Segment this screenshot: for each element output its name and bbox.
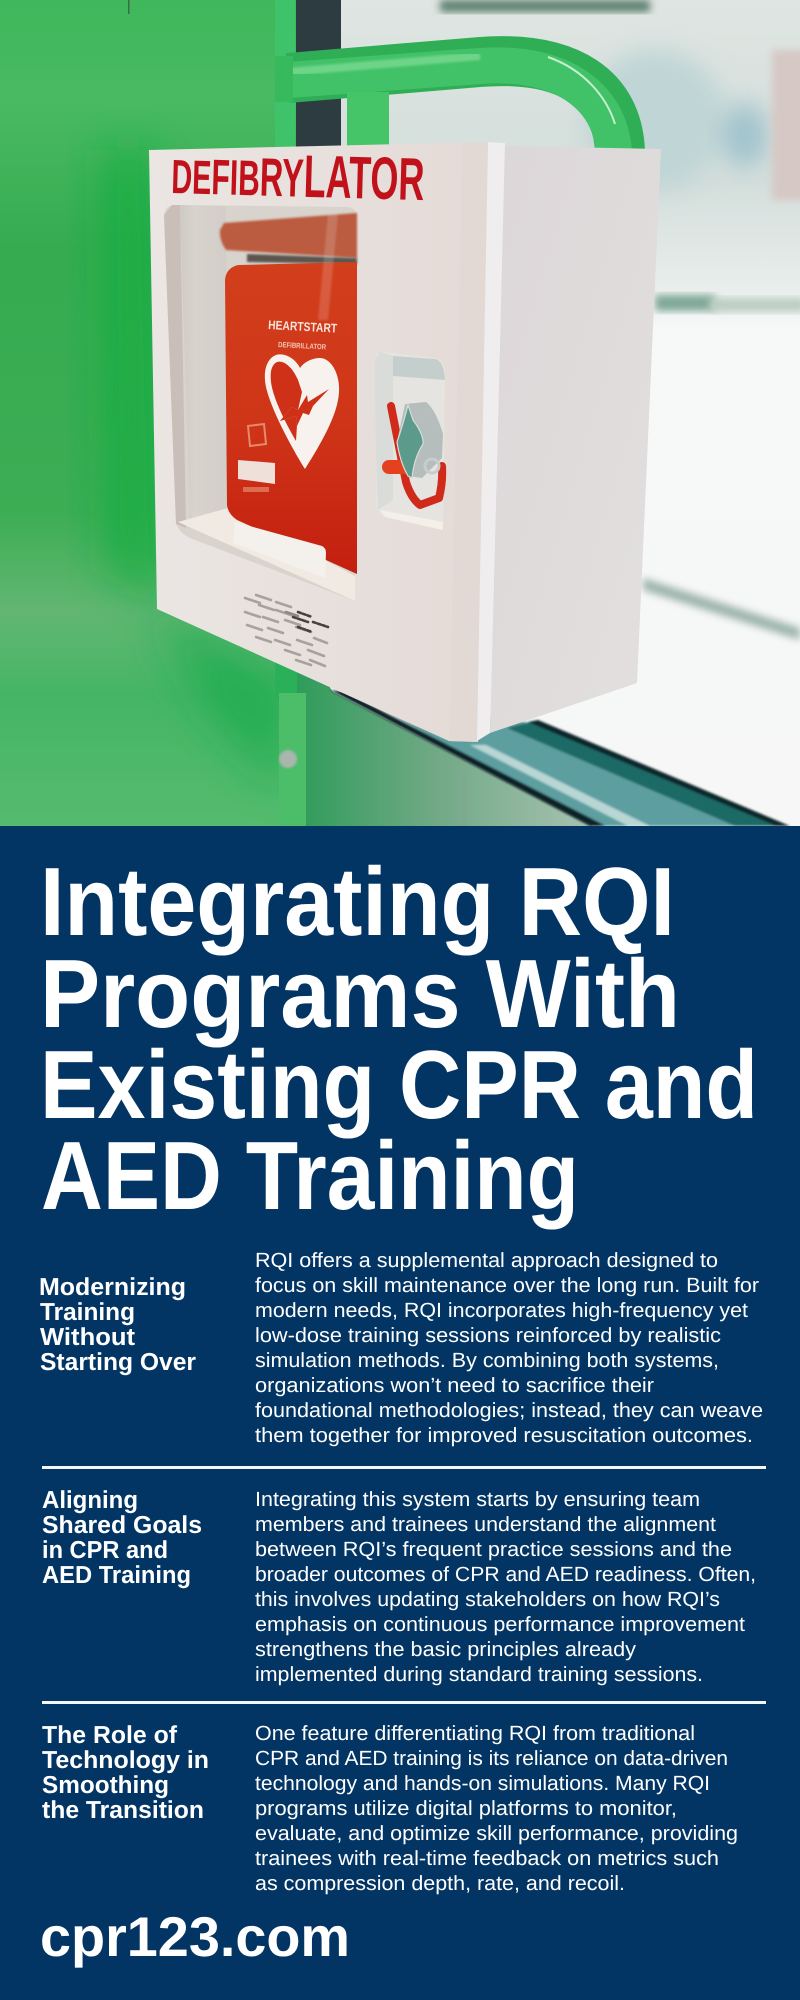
latch recess	[375, 352, 445, 530]
section 3 heading: Technology in	[42, 1747, 209, 1774]
section 1 body text: focus on skill maintenance over the long run. Built for	[255, 1274, 759, 1297]
section 2 heading: Aligning	[42, 1487, 138, 1514]
section 2 body text	[255, 1488, 756, 1686]
glass reflection	[318, 214, 338, 320]
section 1 body text: organizations won’t need to sacrifice their	[255, 1374, 654, 1397]
section 3 heading: the Transition	[42, 1797, 204, 1824]
navy content panel	[0, 826, 800, 2000]
photo background: window frame post	[295, 0, 341, 150]
section 1 heading: Modernizing	[39, 1274, 186, 1301]
icon: heart with lightning bolt	[265, 354, 339, 469]
title	[40, 847, 758, 1230]
section 3 body text: programs utilize digital platforms to monitor,	[255, 1797, 677, 1820]
viewing window	[164, 205, 357, 601]
red seal strap	[389, 406, 442, 505]
AED small sticker	[238, 424, 275, 492]
AED label: HEARTSTART: DEFIBRILLATOR	[278, 340, 327, 352]
AED device body	[225, 262, 357, 574]
AED cap	[220, 213, 357, 258]
section 3 heading	[42, 1722, 209, 1824]
section 2 body text: broader outcomes of CPR and AED readiness. Often,	[255, 1563, 756, 1586]
section 1: Modernizing Training	[39, 1249, 763, 1447]
section 1 body text: them together for improved resuscitation outcomes.	[255, 1424, 753, 1447]
title: Programs With	[40, 939, 680, 1048]
photo: wall-mounted defibrillator cabinet	[0, 0, 800, 826]
speaker vent slots	[245, 595, 328, 666]
section 1 heading: Starting Over	[40, 1349, 196, 1376]
section 3 heading: The Role of	[42, 1722, 178, 1749]
section 1 heading: Training	[40, 1299, 135, 1326]
section 3: The Role of Technology	[42, 1722, 738, 1895]
section 1 body text: low-dose training sessions reinforced by realistic	[255, 1324, 721, 1347]
title: AED Training	[41, 1121, 579, 1230]
cabinet front	[149, 139, 505, 742]
section 3 body text: trainees with real-time feedback on metrics such	[255, 1847, 719, 1870]
AED label: HEARTSTART	[268, 318, 338, 352]
hinge plate and screw	[279, 693, 306, 826]
section 3 body text	[255, 1722, 738, 1895]
section 2 heading: AED Training	[42, 1562, 191, 1589]
section 2 body text: this involves updating stakeholders on how RQI’s	[255, 1588, 720, 1611]
section 1 heading: Without	[40, 1324, 135, 1351]
AED paper tag	[233, 522, 326, 578]
section 1 body text: simulation methods. By combining both systems,	[255, 1349, 719, 1372]
photo background: blurred window	[330, 0, 800, 826]
cabinet label: DEFIBRYLATOR: DEFIBRYLATOR	[171, 139, 425, 213]
section 3 body text: evaluate, and optimize skill performance, providing	[255, 1822, 738, 1845]
cabinet side panel	[490, 146, 661, 733]
section 2: Aligning Shared Goals	[42, 1487, 756, 1686]
section 1 body text: foundational methodologies; instead, they can weave	[255, 1399, 763, 1422]
section 3 body text: as compression depth, rate, and recoil.	[255, 1872, 625, 1895]
section 2 body text: implemented during standard training sessions.	[255, 1663, 703, 1686]
grab rail	[275, 56, 620, 152]
photo background: green wall panel	[0, 0, 297, 826]
section 3 heading: Smoothing	[42, 1772, 169, 1799]
section 2 heading: in CPR and	[42, 1537, 168, 1564]
section 1 body text: modern needs, RQI incorporates high-frequency yet	[255, 1299, 748, 1322]
window sill	[330, 690, 790, 826]
section 2 body text: emphasis on continuous performance improvement	[255, 1613, 745, 1636]
section 2 heading	[42, 1487, 202, 1589]
section 2 body text: strengthens the basic principles already	[255, 1638, 637, 1661]
AED label: HEARTSTART: HEARTSTART	[268, 318, 338, 336]
section 1 body text	[255, 1249, 763, 1447]
section 2 body text: members and trainees understand the alignment	[255, 1513, 716, 1536]
title: Integrating RQI	[40, 847, 675, 956]
section 3 body text: CPR and AED training is its reliance on data-driven	[255, 1747, 728, 1770]
section 2 body text: between RQI’s frequent practice sessions and the	[255, 1538, 732, 1561]
section 3 body text: One feature differentiating RQI from traditional	[255, 1722, 695, 1745]
footer website: cpr123.com	[40, 1905, 350, 1968]
section 3 body text: technology and hands-on simulations. Many RQI	[255, 1772, 710, 1795]
section 1 heading	[39, 1274, 196, 1376]
section 2 body text: Integrating this system starts by ensuring team	[255, 1488, 700, 1511]
lower wall panel below the window	[297, 640, 593, 826]
section 2 heading: Shared Goals	[42, 1512, 202, 1539]
metal wing bolt	[397, 402, 443, 478]
section 1 body text: RQI offers a supplemental approach designed to	[255, 1249, 718, 1272]
